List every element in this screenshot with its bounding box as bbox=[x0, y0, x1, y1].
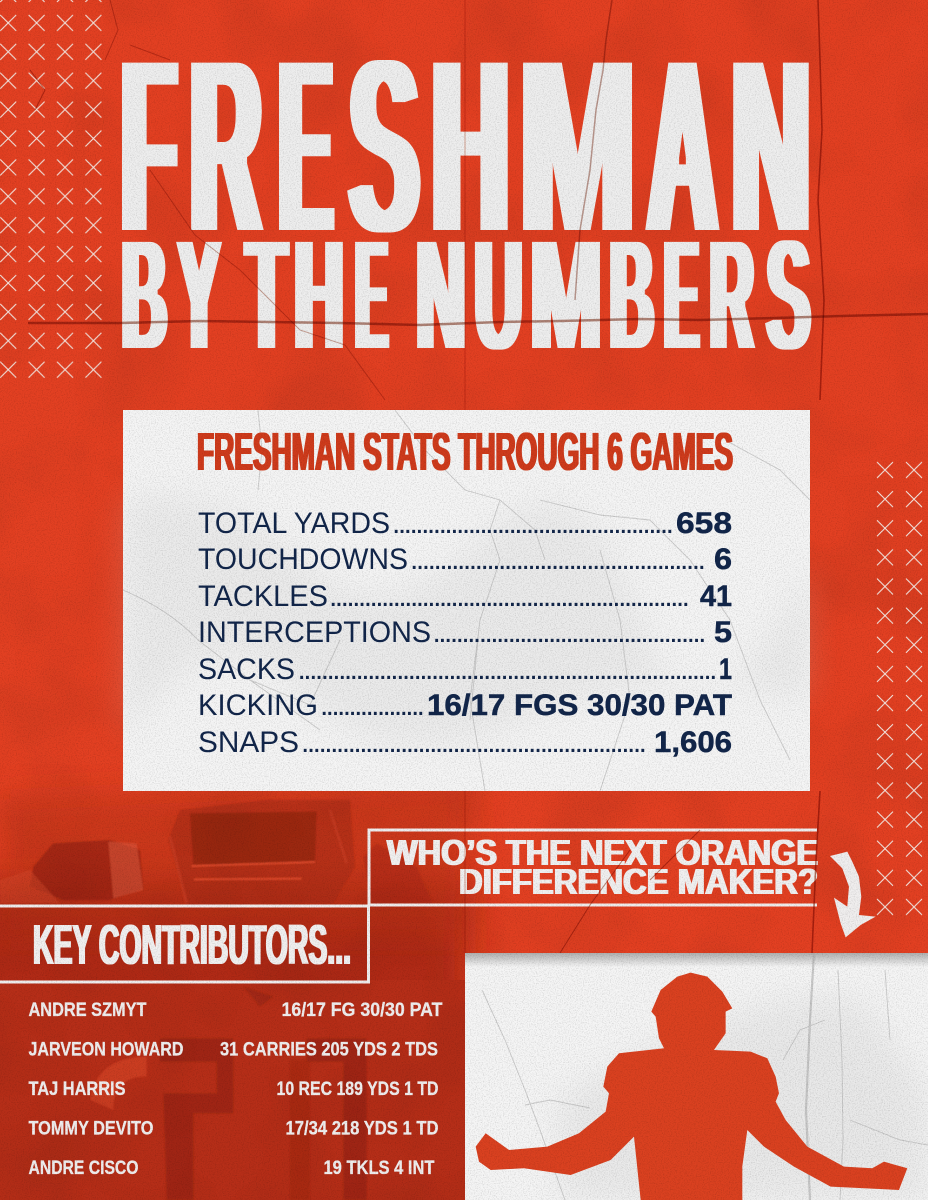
title line: BY THE NUMBERS: U bbox=[475, 205, 522, 384]
title line: BY THE NUMBERS: E bbox=[665, 205, 698, 384]
text: N bbox=[732, 6, 810, 287]
ghost: jersey numbers bbox=[160, 1038, 367, 1200]
stat row: sacks: SACKS bbox=[198, 653, 295, 686]
heading: who's the next orange difference maker bbox=[387, 832, 818, 902]
stat row: touchdowns: TOUCHDOWNS bbox=[198, 543, 408, 576]
stat row: sacks: 1 bbox=[719, 653, 732, 686]
title line: BY THE NUMBERS: E bbox=[356, 205, 387, 384]
row: Andre Cisco bbox=[28, 1158, 435, 1179]
title line: BY THE NUMBERS: N bbox=[417, 205, 465, 384]
stat row: kicking: 16/17 FGS 30/30 PAT bbox=[427, 689, 732, 722]
silhouette: player bbox=[476, 973, 907, 1200]
row: Andre Szmyt: ANDRE SZMYT bbox=[28, 1000, 147, 1021]
row: Jarveon Howard bbox=[28, 1040, 438, 1060]
row: Tommy Devito: 17/34 218 YDS 1 TD bbox=[286, 1118, 438, 1140]
heading: who's the next orange difference maker: DIFFERENCE MAKER? bbox=[459, 861, 818, 902]
title line: FRESHMAN: F bbox=[122, 6, 176, 287]
row: Andre Szmyt bbox=[28, 1000, 443, 1021]
row: Taj Harris bbox=[28, 1079, 438, 1100]
stat row: interceptions: ............................................... bbox=[432, 616, 707, 649]
stat row: kicking: KICKING bbox=[198, 689, 318, 722]
stat row: touchdowns: 6 bbox=[714, 543, 732, 576]
stat row: interceptions: 5 bbox=[714, 616, 732, 649]
title line: FRESHMAN: S bbox=[350, 6, 419, 287]
stat row: snaps: ........................................................... bbox=[301, 726, 647, 759]
row: Tommy Devito: TOMMY DEVITO bbox=[28, 1118, 154, 1140]
title line: FRESHMAN: M bbox=[520, 6, 635, 287]
title line: FRESHMAN: R bbox=[191, 6, 261, 287]
text: S bbox=[767, 205, 810, 384]
title line: BY THE NUMBERS: T bbox=[246, 205, 287, 384]
background: darkened player photo bbox=[0, 780, 470, 1200]
title line: BY THE NUMBERS: R bbox=[710, 205, 754, 384]
x pattern: right bbox=[870, 456, 928, 922]
panel cracks bbox=[123, 410, 810, 791]
stat row: kicking: .................. bbox=[320, 689, 425, 722]
stat row: tackles: .............................................................. bbox=[329, 580, 690, 613]
stat row: total yards: 658 bbox=[676, 507, 732, 540]
stat row: snaps: SNAPS bbox=[198, 726, 299, 759]
stat row: touchdowns: .................................................. bbox=[410, 543, 706, 576]
stat row: interceptions: INTERCEPTIONS bbox=[198, 616, 431, 649]
frame: key contributors bbox=[0, 906, 368, 982]
stat row: sacks: ........................................................................ bbox=[298, 653, 717, 686]
title line: BY THE NUMBERS: B bbox=[610, 205, 654, 384]
row: Taj Harris: 10 REC 189 YDS 1 TD bbox=[276, 1079, 438, 1100]
title line: BY THE NUMBERS: Y bbox=[178, 205, 219, 384]
list: key contributors bbox=[28, 1000, 443, 1179]
stat row: tackles: 41 bbox=[700, 580, 732, 613]
x pattern: left bbox=[0, 0, 108, 385]
frame: next difference maker bbox=[369, 830, 817, 906]
stat row: snaps: 1,606 bbox=[654, 726, 732, 759]
row: Andre Szmyt: 16/17 FG 30/30 PAT bbox=[282, 1000, 443, 1021]
panel: freshman stats bbox=[123, 410, 810, 791]
row: Jarveon Howard: JARVEON HOWARD bbox=[28, 1040, 184, 1060]
row: Andre Cisco: 19 TKLS 4 INT bbox=[324, 1158, 435, 1179]
heading: who's the next orange difference maker: WHO’S THE NEXT ORANGE bbox=[387, 832, 818, 873]
row: Tommy Devito bbox=[28, 1118, 438, 1140]
stat row: total yards: TOTAL YARDS bbox=[198, 507, 390, 540]
text: KEY CONTRIBUTORS... bbox=[33, 913, 351, 977]
stat row: tackles: TACKLES bbox=[198, 580, 328, 613]
title line: BY THE NUMBERS: M bbox=[530, 205, 602, 384]
title bbox=[122, 6, 810, 384]
ghost: glove bbox=[0, 840, 433, 903]
title line: BY THE NUMBERS: B bbox=[122, 205, 167, 384]
paper creases bbox=[28, 0, 928, 953]
stat row: total yards: ................................................ bbox=[392, 507, 674, 540]
row: Jarveon Howard: 31 CARRIES 205 YDS 2 TDS bbox=[220, 1040, 438, 1060]
row: Andre Cisco: ANDRE CISCO bbox=[28, 1158, 138, 1179]
row: Taj Harris: TAJ HARRIS bbox=[28, 1079, 126, 1100]
icon: brush arrow bbox=[830, 852, 876, 937]
panel cracks bbox=[482, 953, 928, 1200]
panel: mystery player bbox=[465, 953, 928, 1200]
title line: FRESHMAN: A bbox=[648, 6, 717, 287]
ghost: helmet bbox=[168, 800, 355, 905]
title line: FRESHMAN: E bbox=[280, 6, 332, 287]
title line: FRESHMAN: H bbox=[432, 6, 509, 287]
title line: BY THE NUMBERS: H bbox=[295, 205, 343, 384]
